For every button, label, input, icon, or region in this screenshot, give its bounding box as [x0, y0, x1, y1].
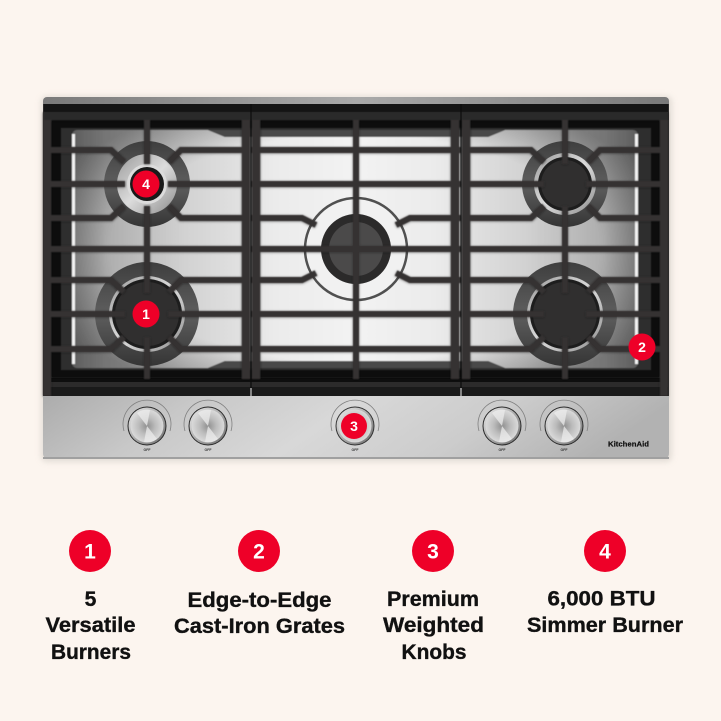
marker 1: burners: 1: [142, 306, 150, 322]
marker 3: knobs: 3: [350, 418, 358, 434]
legend item 4: [527, 530, 683, 637]
knob 2: OFF: [204, 448, 212, 452]
legend item 3: Knobs: [402, 641, 466, 664]
steel well with grate holes: [51, 120, 660, 378]
marker 4: simmer burner: 4: [142, 176, 150, 192]
legend item 3: 3: [427, 540, 439, 564]
cooktop: [41, 96, 672, 462]
knob 5: OFF: [560, 448, 568, 452]
marker 4: simmer burner: [132, 170, 160, 198]
burner: bottom-right: [513, 262, 617, 366]
right grate: [462, 150, 664, 349]
marker 2: grates: [628, 334, 656, 360]
grate seams: [251, 104, 461, 388]
center grate: [251, 150, 461, 349]
legend item 3: Weighted: [383, 614, 484, 637]
grate end bars: [246, 119, 466, 379]
legend item 4: 4: [599, 540, 611, 564]
legend item 1: 5: [85, 588, 97, 611]
legend item 1: 1: [84, 540, 96, 564]
knob 3: [331, 400, 379, 452]
marker 3: knobs: [341, 413, 367, 439]
burner: top-left simmer: [104, 141, 190, 227]
control panel: [43, 388, 669, 459]
legend item 1: Versatile: [46, 614, 136, 637]
outer side rails: [47, 112, 664, 396]
marker 2: grates: 2: [638, 339, 646, 355]
brand logo: KitchenAid: [608, 440, 649, 448]
cast-iron grates: [44, 112, 668, 396]
burner: center: [305, 198, 407, 300]
legend item 2: Cast-Iron Grates: [174, 615, 345, 638]
knob 4: [478, 400, 526, 452]
legend item 1: Burners: [51, 641, 131, 664]
knob 4: OFF: [498, 448, 506, 452]
legend item 2: Edge-to-Edge: [188, 589, 332, 612]
legend item 4: Simmer Burner: [527, 614, 683, 637]
burner: top-right: [522, 141, 608, 227]
knob 1: [123, 400, 171, 452]
legend item 1: [46, 530, 136, 664]
legend item 2: [174, 530, 345, 638]
knob 2: [184, 400, 232, 452]
knob 5: [540, 400, 588, 452]
legend item 3: [383, 530, 484, 664]
burner: bottom-left: [95, 262, 199, 366]
legend item 3: Premium: [387, 588, 479, 611]
legend item 4: 6,000 BTU: [548, 588, 656, 610]
knob 1: OFF: [144, 448, 151, 452]
legend item 2: 2: [253, 540, 265, 564]
black frame: [43, 104, 669, 396]
left grate: [47, 150, 250, 349]
top steel strip: [43, 97, 669, 109]
knob 3: OFF: [352, 448, 359, 452]
marker 1: burners: [132, 300, 160, 328]
